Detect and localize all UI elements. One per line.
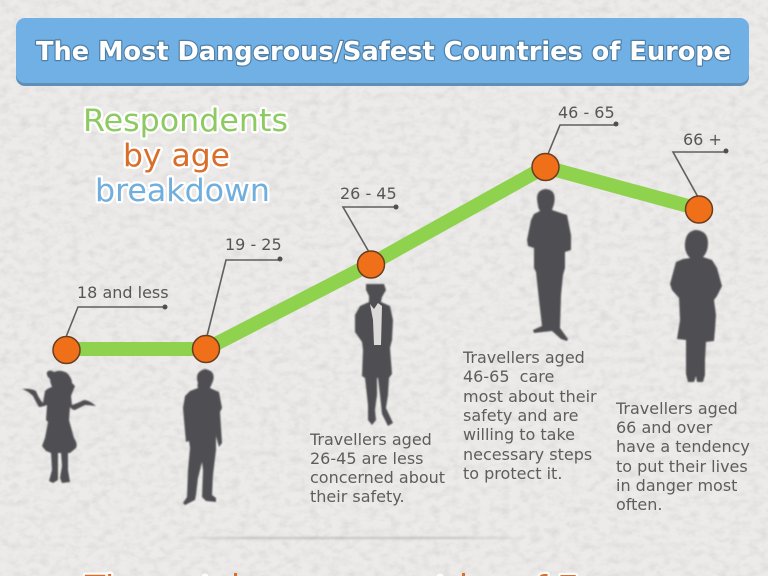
callout: 18 and less: 18 and less <box>77 283 169 302</box>
title banner: The Most Dangerous/Safest Countries of Europe <box>36 37 731 67</box>
text: travellers aged 26-45: Travellers aged <box>309 430 432 449</box>
callout: 18 and less <box>66 283 169 337</box>
section divider shadow <box>170 537 528 539</box>
heading: respondents by age breakdown: by age <box>123 138 230 174</box>
text: travellers aged 46-65: safety and are <box>463 406 579 425</box>
text: travellers aged 66 and over: to put their lives <box>616 457 748 476</box>
title banner <box>16 18 749 86</box>
text: travellers aged 46-65: 46-65 care <box>463 367 554 386</box>
text: travellers aged 26-45: their safety. <box>310 487 405 506</box>
text: travellers aged 66 and over: have a tendency <box>616 437 750 456</box>
callout: 19 - 25 <box>207 235 282 336</box>
silhouette: woman in jacket <box>355 284 393 426</box>
text: travellers aged 46-65: to protect it. <box>463 464 562 483</box>
text: travellers aged 66 and over: 66 and over <box>616 418 713 437</box>
text: travellers aged 46-65: Travellers aged <box>462 348 585 367</box>
silhouette: girl <box>22 370 96 483</box>
text: travellers aged 46-65: most about their <box>463 387 597 406</box>
silhouette: older woman <box>670 230 722 382</box>
text: travellers aged 66 and over: Travellers aged <box>615 399 738 418</box>
heading: respondents by age breakdown <box>83 103 288 209</box>
callout: 19 - 25: 19 - 25 <box>225 235 282 254</box>
silhouette: young man <box>183 369 222 505</box>
chart nodes <box>53 154 712 364</box>
callout: 66 +: 66 + <box>683 130 722 149</box>
text: travellers aged 26-45: 26-45 are less <box>310 449 424 468</box>
silhouette: older man <box>527 189 571 341</box>
text: travellers aged 66 and over: in danger most <box>616 476 737 495</box>
cropped bottom heading <box>84 568 578 576</box>
callout: 46 - 65 <box>548 103 618 154</box>
callout: 26 - 45 <box>340 184 398 252</box>
callout: 46 - 65: 46 - 65 <box>558 103 615 122</box>
text: travellers aged 66 and over: often. <box>616 495 662 514</box>
line chart: age trend <box>66 167 699 349</box>
heading: respondents by age breakdown: breakdown <box>95 173 270 209</box>
text: travellers aged 26-45: concerned about <box>310 468 445 487</box>
callout: 26 - 45: 26 - 45 <box>340 184 397 203</box>
text: travellers aged 46-65: willing to take <box>463 425 575 444</box>
text: travellers aged 46-65: necessary steps <box>463 445 592 464</box>
callout: 66 + <box>673 130 728 197</box>
heading: respondents by age breakdown: Respondents <box>83 103 288 139</box>
